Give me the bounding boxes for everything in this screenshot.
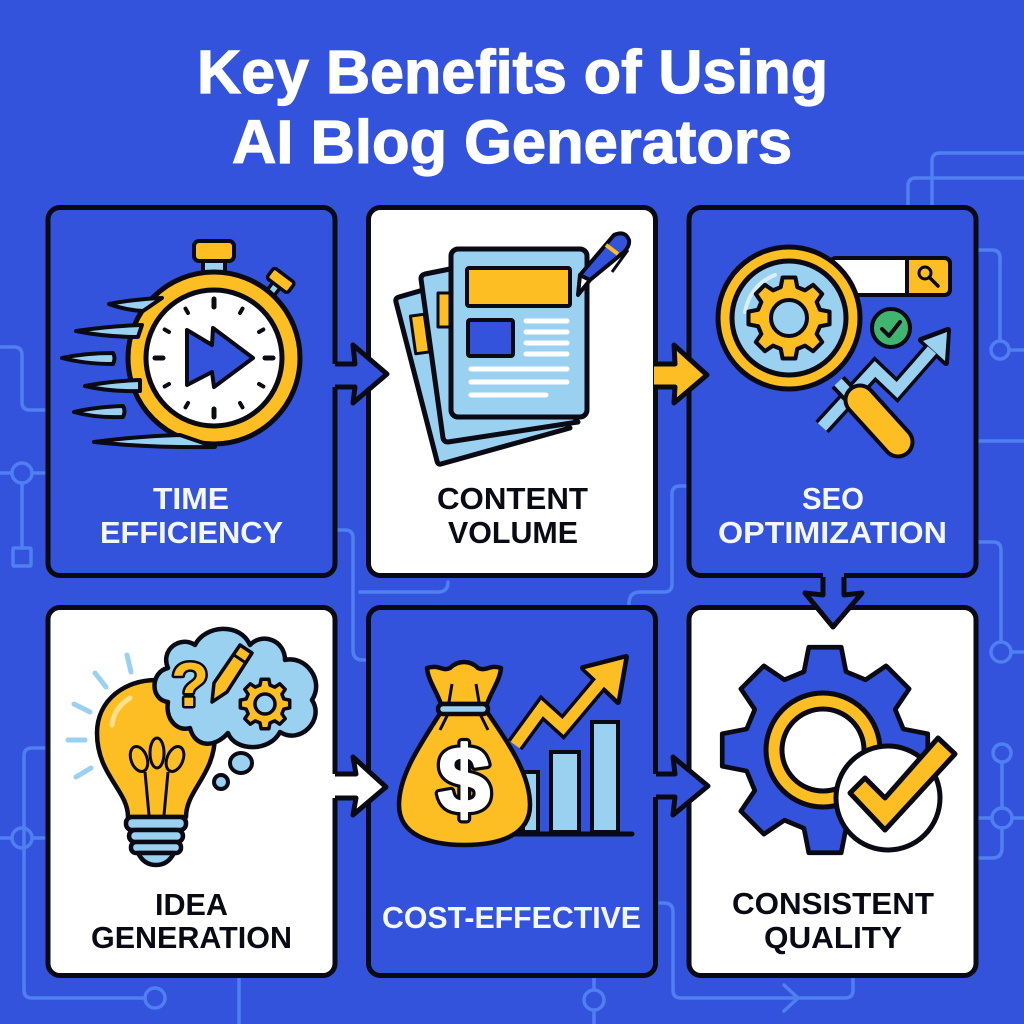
label: time efficiency	[100, 481, 283, 550]
label: idea generation: IDEA	[155, 887, 228, 922]
title: Key Benefits of Using	[197, 38, 828, 106]
panel: idea generation	[48, 608, 335, 976]
arrow: cost to quality	[652, 757, 708, 815]
icon: document stack	[396, 249, 587, 464]
label: time efficiency: EFFICIENCY	[100, 515, 283, 550]
icon: check badge	[872, 309, 910, 347]
label: cost-effective: COST-EFFECTIVE	[382, 900, 641, 935]
arrow: content to seo	[654, 345, 707, 403]
label: seo optimization	[718, 481, 947, 550]
label: seo optimization: SEO	[802, 481, 864, 516]
icon: magnifying glass	[718, 247, 898, 442]
icon: pen	[578, 233, 629, 295]
arrow: idea to cost	[331, 757, 386, 815]
icon: light rays	[68, 655, 131, 777]
label: consistent quality	[732, 886, 934, 955]
label: idea generation: GENERATION	[91, 920, 292, 955]
icon: light bulb	[97, 680, 215, 865]
panel: cost-effective	[368, 608, 656, 976]
panel: content volume	[368, 208, 656, 576]
icon: growth arrow	[822, 330, 948, 427]
title	[197, 38, 828, 176]
panel: seo optimization	[689, 208, 976, 576]
title: AI Blog Generators	[232, 108, 792, 176]
label: content volume: CONTENT	[437, 481, 588, 516]
label: idea generation	[91, 887, 292, 955]
icon: money bag: $	[438, 727, 490, 832]
label: time efficiency: TIME	[153, 481, 229, 516]
icon: stopwatch	[62, 241, 300, 447]
icon: money bag: $	[438, 727, 490, 832]
icon: search bar	[830, 258, 950, 295]
label: seo optimization: OPTIMIZATION	[718, 515, 947, 550]
icon: money bag	[399, 662, 530, 845]
label: content volume: VOLUME	[448, 515, 578, 550]
icon: thought cloud	[154, 629, 316, 789]
arrow: seo to quality	[805, 573, 862, 627]
arrow: time to content	[331, 345, 387, 403]
label: content volume	[437, 481, 588, 550]
panel: time efficiency	[48, 208, 335, 576]
label: consistent quality: QUALITY	[764, 920, 902, 955]
label: consistent quality: CONSISTENT	[732, 886, 934, 921]
icon: thought cloud: ?	[171, 651, 209, 720]
icon: bar chart	[512, 722, 632, 834]
icon: speed lines	[62, 298, 215, 447]
panel: consistent quality	[689, 608, 976, 976]
icon: rising arrow	[515, 657, 626, 745]
icon: quality gear	[722, 647, 955, 853]
